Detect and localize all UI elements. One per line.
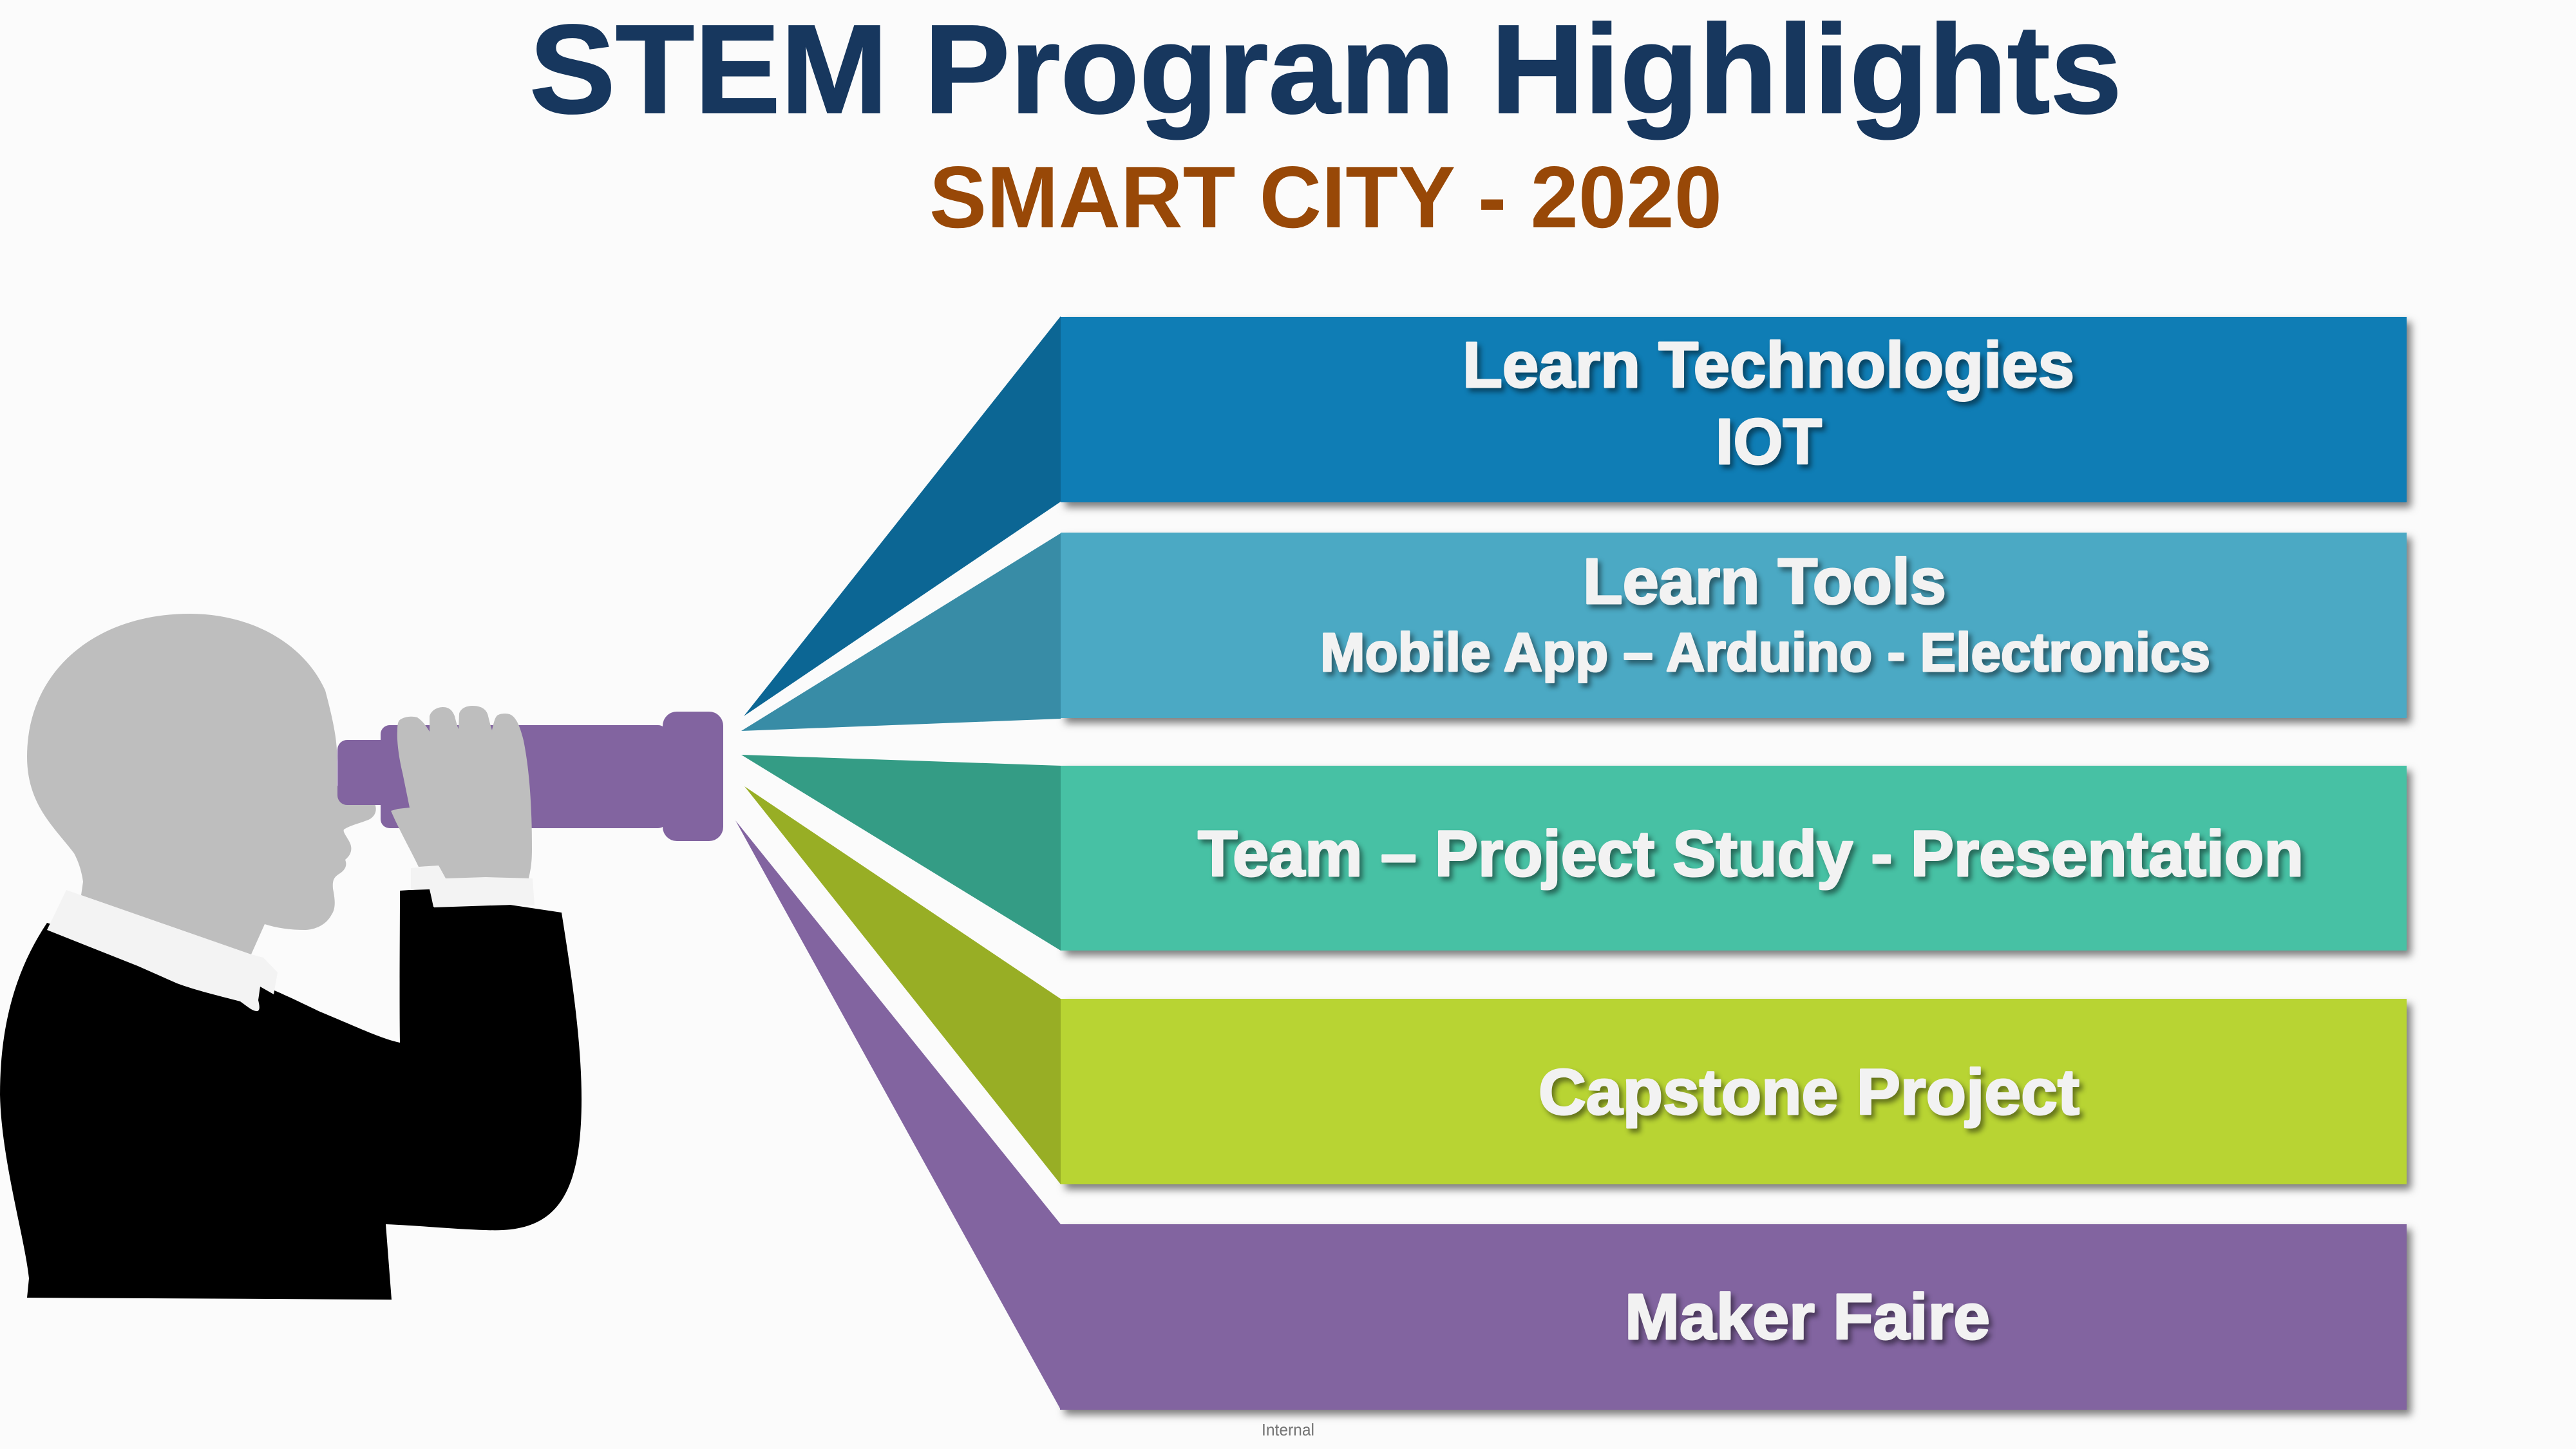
head	[27, 614, 376, 954]
panel: Learn Technologies	[744, 316, 2407, 716]
label: Capstone Project	[1539, 1056, 2079, 1128]
label line 2: IOT	[1716, 406, 1822, 478]
bar	[1061, 766, 2407, 951]
beam	[744, 316, 1061, 716]
label line 2: Mobile App – Arduino - Electronics	[1320, 622, 2210, 683]
panel: Team Project Study Presentation	[741, 755, 2407, 951]
footer label: Internal	[1262, 1420, 1314, 1439]
bar	[1060, 1224, 2407, 1410]
label: Learn Technologies	[1463, 329, 2074, 401]
bar	[1061, 317, 2407, 502]
beam	[741, 755, 1061, 951]
bar	[1061, 533, 2407, 718]
bar	[1061, 999, 2407, 1184]
label: Learn Tools	[1583, 545, 1946, 618]
hand	[391, 706, 532, 878]
panel: Learn Tools	[741, 533, 2407, 731]
beam	[744, 786, 1061, 1184]
person looking through telescope	[0, 614, 723, 1300]
telescope	[337, 712, 723, 841]
subtitle: SMART CITY - 2020	[929, 148, 1722, 246]
beam	[735, 820, 1061, 1410]
shirt collar	[47, 890, 278, 1011]
title: STEM Program Highlights	[529, 0, 2122, 140]
panel: Maker Faire	[735, 820, 2407, 1410]
wrist cuff	[411, 866, 535, 907]
label: Team – Project Study - Presentation	[1198, 818, 2304, 890]
jacket	[0, 889, 582, 1300]
panel: Capstone Project	[744, 786, 2407, 1184]
label: Maker Faire	[1625, 1281, 1990, 1353]
beam	[741, 533, 1061, 731]
